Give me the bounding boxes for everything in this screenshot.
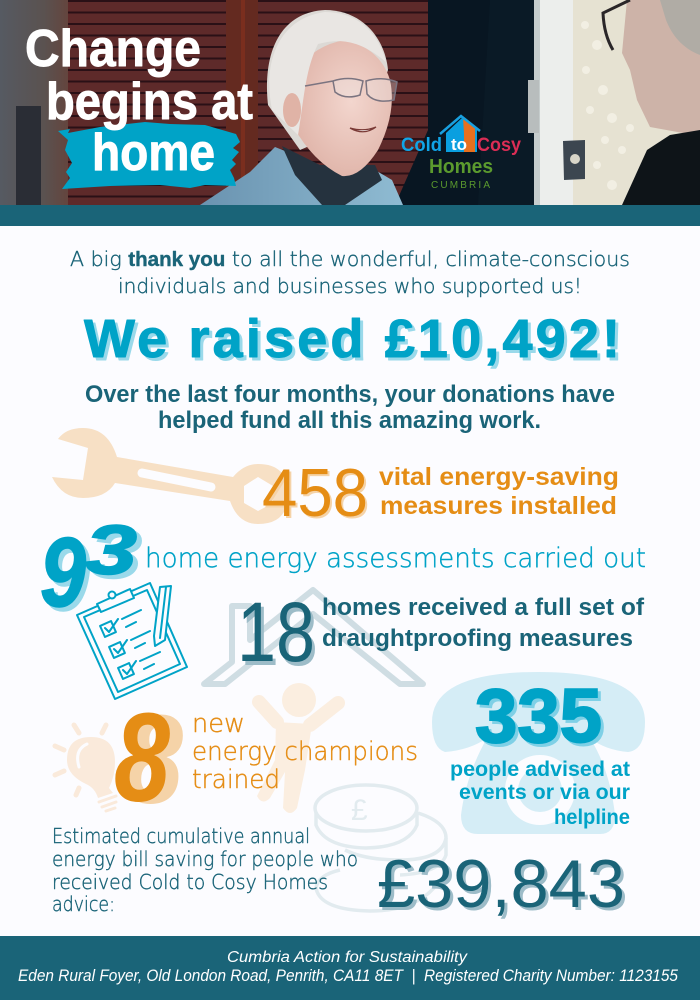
subheading: Over the last four months, your donations have (85, 381, 615, 408)
title: home (92, 124, 215, 182)
stat: 8 energy champions: trained (192, 765, 280, 795)
stat: 18 homes: draughtproofing measures (322, 625, 633, 652)
savings description: energy bill saving for people who (52, 847, 358, 871)
title: Change (25, 20, 201, 78)
logo: Cold to Cosy Homes Cumbria: to (451, 135, 467, 154)
stat: 18 homes (237, 585, 645, 683)
icon: coins (315, 785, 446, 911)
stat: 458 measures: measures installed (380, 492, 617, 520)
headline: amount raised: We raised £10,492! (87, 312, 623, 372)
icon: person (257, 683, 338, 813)
stat: 335 people advised: 335 (475, 674, 602, 759)
icon: clipboard (77, 583, 187, 699)
stat: 335 people advised: people advised at (450, 758, 630, 781)
icon: telephone (432, 672, 645, 834)
logo: Cold to Cosy Homes Cumbria (401, 116, 521, 191)
stat: 8 energy champions: energy champions (192, 737, 418, 767)
title (25, 20, 253, 182)
stat: 93 assessments: 9 (40, 517, 86, 627)
stat: 8 energy champions: new (192, 709, 245, 739)
savings description: Estimated cumulative annual (52, 824, 310, 848)
footer: Cumbria Action for Sustainability (227, 949, 468, 966)
stat: 458 measures (262, 455, 619, 533)
icon: light bulb (55, 725, 127, 811)
stat: 8 energy champions: 8 (125, 689, 183, 830)
icon: house outline (204, 590, 423, 684)
stat: 458 measures: vital energy-saving (379, 463, 619, 491)
stat: 335 people advised: helpline (554, 806, 630, 829)
stat: 93 assessments: 9 (44, 521, 90, 631)
stat: 335 people advised (450, 674, 630, 829)
headline: amount raised: We raised £10,492! (84, 309, 620, 369)
brush stroke behind home (58, 122, 240, 189)
stat: 93 assessments: 3 (85, 511, 137, 589)
logo: Cold to Cosy Homes Cumbria: Cosy (477, 134, 521, 156)
stat: 93 assessments: home energy assessments carried out (145, 543, 646, 574)
header band (0, 205, 700, 226)
thank you text (70, 247, 630, 298)
logo: Cold to Cosy Homes Cumbria: CUMBRIA (431, 180, 490, 191)
thank you text: individuals and businesses who supported us! (118, 274, 582, 298)
subheading: helped fund all this amazing work. (158, 407, 541, 434)
stat: 18 homes: 18 (237, 585, 315, 679)
stat: 39,843 savings: £39,843 (377, 846, 625, 922)
logo: Cold to Cosy Homes Cumbria: Homes (429, 156, 493, 178)
savings description: received Cold to Cosy Homes (52, 870, 328, 894)
logo: Cold to Cosy Homes Cumbria: Cold (401, 134, 442, 156)
stat: 8 energy champions (114, 687, 418, 830)
stat: 335 people advised: 335 (478, 677, 605, 762)
stat: 39,843 savings: £39,843 (380, 849, 628, 925)
savings description: advice: (52, 892, 115, 916)
header photo (0, 0, 700, 205)
stat: 335 people advised: events or via our (459, 781, 630, 804)
stat: 18 homes: 18 (240, 589, 318, 683)
thank you text: A big thank you to all the wonderful, climate-conscious (70, 247, 630, 271)
stat: 8 energy champions: 8 (114, 687, 170, 828)
subheading (85, 381, 615, 434)
footer (0, 936, 700, 1000)
icon: wrench (52, 428, 288, 524)
stat: 93 assessments (40, 511, 646, 631)
stat: 458 measures: 458 (262, 455, 368, 531)
stat: 18 homes: homes received a full set of (322, 594, 645, 621)
icon: coins: £ (351, 794, 368, 827)
stat: 93 assessments: 3 (90, 515, 142, 593)
savings description (52, 824, 358, 916)
title: begins at (46, 73, 253, 131)
stat: 458 measures: 458 (264, 457, 370, 533)
